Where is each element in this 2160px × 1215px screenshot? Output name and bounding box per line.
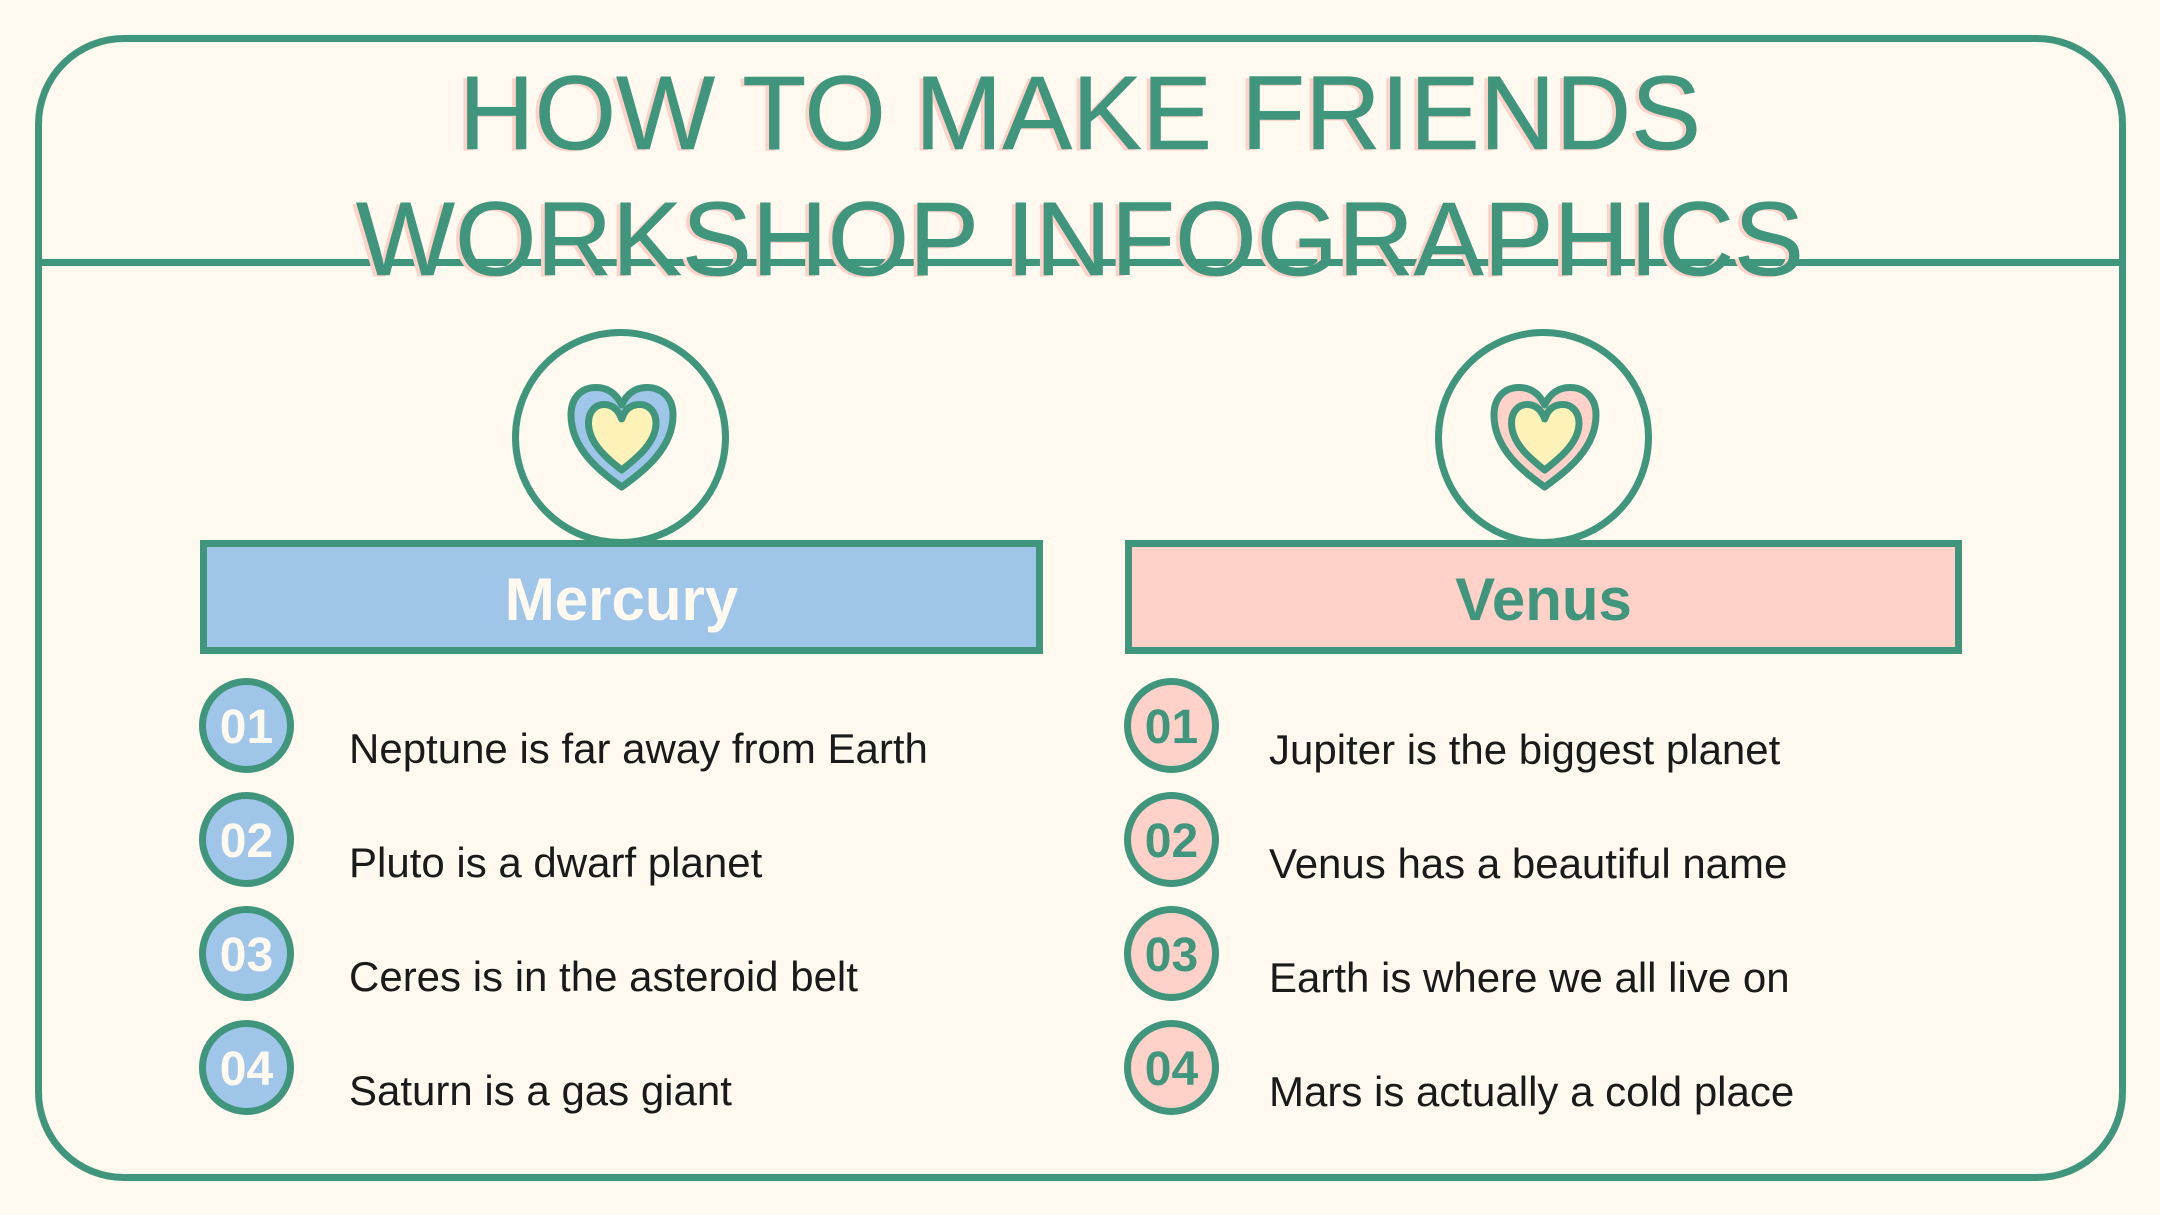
heading bar: Venus bbox=[1125, 540, 1962, 654]
number badge 01: 01 bbox=[220, 701, 273, 754]
heading bar: Mercury bbox=[200, 540, 1043, 654]
item text 03: Ceres is in the asteroid belt bbox=[349, 953, 858, 1000]
title: HOW TO MAKE FRIENDS bbox=[459, 55, 1701, 172]
number badge 04 bbox=[199, 1020, 294, 1115]
heading bar: Mercury: Mercury bbox=[505, 566, 738, 633]
number badge 02 bbox=[199, 792, 294, 887]
item text 01: Neptune is far away from Earth bbox=[349, 725, 928, 772]
number badge 02 bbox=[1124, 792, 1219, 887]
list item 04 bbox=[1124, 1020, 1794, 1115]
item text 02: Pluto is a dwarf planet bbox=[349, 839, 762, 886]
item text 03: Earth is where we all live on bbox=[1269, 954, 1790, 1001]
number badge 01: 01 bbox=[1145, 701, 1198, 754]
number badge 03 bbox=[199, 906, 294, 1001]
number badge 03: 03 bbox=[1145, 929, 1198, 982]
icon: Venus heart badge bbox=[1435, 329, 1652, 540]
list item 04 bbox=[199, 1020, 732, 1115]
title bbox=[352, 55, 1804, 298]
list item 01 bbox=[1124, 678, 1780, 773]
panel: Mercury bbox=[199, 329, 1043, 1115]
number badge 04: 04 bbox=[220, 1043, 273, 1096]
list item 02 bbox=[1124, 792, 1787, 887]
number badge 04 bbox=[1124, 1020, 1219, 1115]
number badge 03: 03 bbox=[220, 929, 273, 982]
number badge 04: 04 bbox=[1145, 1043, 1198, 1096]
panel: Venus bbox=[1124, 329, 1962, 1115]
item text 01: Jupiter is the biggest planet bbox=[1269, 726, 1780, 773]
title: WORKSHOP INFOGRAPHICS bbox=[356, 181, 1804, 298]
number badge 02: 02 bbox=[220, 815, 273, 868]
header divider bbox=[38, 259, 2123, 266]
list item 02 bbox=[199, 792, 762, 887]
item text 04: Mars is actually a cold place bbox=[1269, 1068, 1794, 1115]
item text 04: Saturn is a gas giant bbox=[349, 1067, 732, 1114]
list item 01 bbox=[199, 678, 928, 773]
number badge 02: 02 bbox=[1145, 815, 1198, 868]
item text 02: Venus has a beautiful name bbox=[1269, 840, 1787, 887]
list item 03 bbox=[199, 906, 858, 1001]
heading bar: Venus: Venus bbox=[1455, 566, 1632, 633]
list item 03 bbox=[1124, 906, 1790, 1001]
number badge 01 bbox=[1124, 678, 1219, 773]
number badge 03 bbox=[1124, 906, 1219, 1001]
number badge 01 bbox=[199, 678, 294, 773]
icon: Mercury heart badge bbox=[512, 329, 729, 540]
